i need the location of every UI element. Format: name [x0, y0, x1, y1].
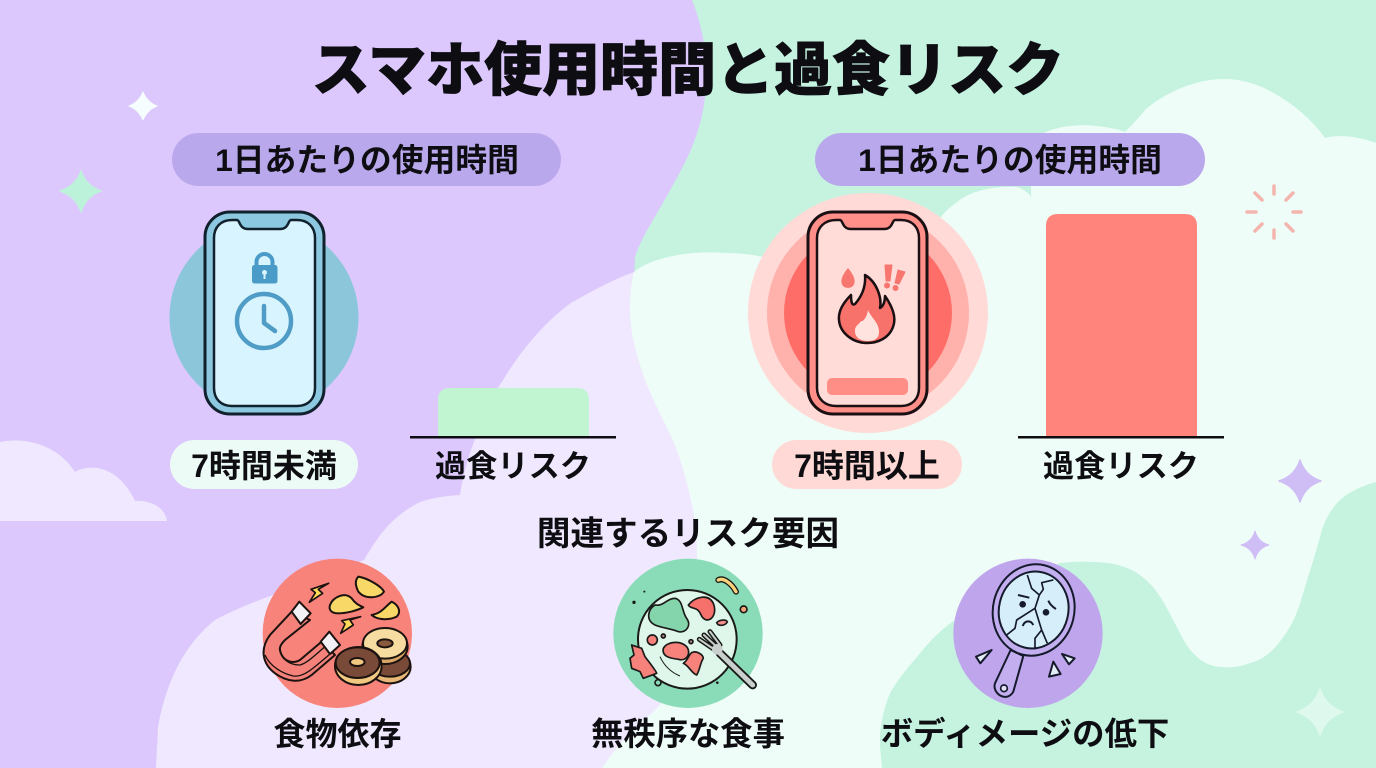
icon: alert phone — [748, 193, 988, 433]
title: スマホ使用時間と過食リスク — [312, 38, 1064, 103]
sparkle: purple small — [1241, 531, 1269, 559]
label pill: under 7 hours — [170, 440, 358, 489]
label: 食物依存 — [273, 716, 402, 752]
icon: pink burst — [1247, 186, 1301, 238]
risk factor: food addiction — [263, 559, 412, 752]
sparkle: pale lower right — [1297, 689, 1343, 735]
panel: 7 hours or more — [748, 133, 1224, 489]
label pill: under 7 hours: 7時間未満 — [191, 448, 337, 484]
heading: related risk factors: 関連するリスク要因 — [537, 515, 839, 553]
background: pale lavender cloud — [156, 272, 700, 768]
label pill: 7 hours or more: 7時間以上 — [794, 448, 940, 484]
icon: calm phone — [170, 212, 358, 414]
label: 無秩序な食事 — [591, 716, 785, 752]
heading pill: left — [172, 133, 561, 186]
bar chart: low risk — [410, 388, 616, 484]
sparkle: white — [129, 92, 157, 120]
icon: messy plate — [613, 559, 763, 708]
risk factor: irregular eating — [591, 559, 785, 752]
background: mint right half — [630, 0, 1376, 768]
heading pill: right — [815, 133, 1205, 186]
risk factor: declining body image — [881, 556, 1169, 752]
label pill: 7 hours or more — [772, 440, 962, 489]
bar chart: high risk — [1018, 214, 1224, 484]
panel: under 7 hours — [170, 133, 616, 489]
icon: cracked mirror — [953, 556, 1103, 708]
icon: magnet and snacks — [263, 559, 412, 708]
background: small cloud left — [0, 440, 167, 521]
heading pill: right: 1日あたりの使用時間 — [858, 142, 1162, 178]
label: ボディメージの低下 — [881, 715, 1169, 752]
bar chart: high risk: 過食リスク — [1043, 449, 1199, 484]
sparkle: purple large — [1279, 460, 1321, 502]
background: pale mint cloud — [602, 79, 1376, 768]
sparkle: mint — [60, 171, 101, 212]
heading pill: left: 1日あたりの使用時間 — [215, 142, 519, 178]
bar chart: low risk: 過食リスク — [435, 449, 591, 484]
